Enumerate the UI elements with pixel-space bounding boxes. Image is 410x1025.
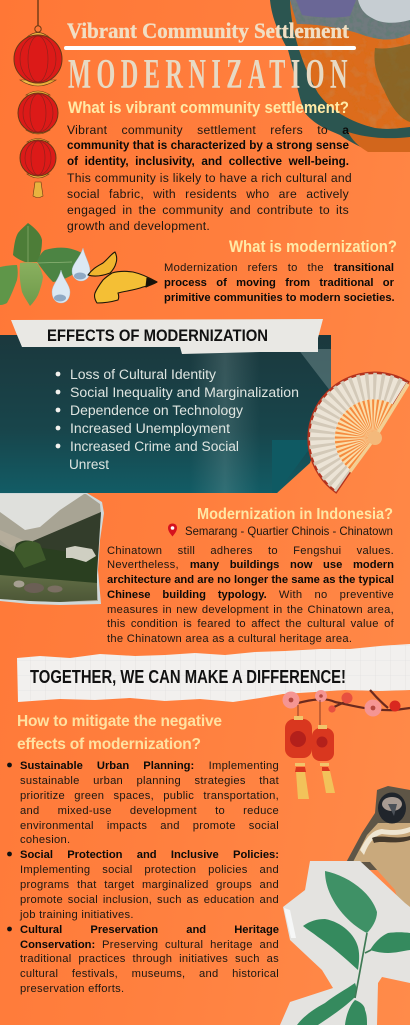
title: MODERNIZATION: MODERNIZATION bbox=[68, 51, 348, 98]
text block: mitigation strategies: preservation efforts. bbox=[20, 983, 124, 995]
text block: chinatown: Nevertheless, many buildings now use modern bbox=[107, 559, 394, 571]
fan bbox=[309, 373, 410, 492]
text block: vibrant community definition: of identity, inclusivity, and collective well-being. bbox=[67, 155, 349, 168]
text block: modernization definition: primitive communities to modern societies. bbox=[164, 292, 395, 304]
text block: vibrant community definition: community that is characterized by a strong sense bbox=[67, 139, 349, 152]
icon: water drops bbox=[52, 248, 90, 303]
text block: chinatown: measures in new development in the Chinatown area, bbox=[107, 604, 394, 616]
list: effects bbox=[56, 367, 299, 472]
text block: chinatown: the Chinatown area as a cultural heritage area. bbox=[107, 633, 352, 645]
text block: chinatown: Chinese building typology. With no preventive bbox=[107, 589, 394, 601]
text block: mitigation strategies: Sustainable Urban Planning: Implementing bbox=[20, 760, 279, 772]
list: effects: Unrest bbox=[69, 457, 109, 472]
list: effects: Social Inequality and Marginalization bbox=[70, 385, 299, 400]
heading: what is vibrant community settlement: What is vibrant community settlement? bbox=[68, 98, 349, 117]
penguin collage bbox=[342, 786, 410, 922]
text block: mitigation strategies: environmental impacts and promote social bbox=[20, 820, 279, 832]
heading: effects of modernization: EFFECTS OF MODERNIZATION bbox=[47, 326, 268, 345]
list: effects: Increased Unemployment bbox=[70, 421, 230, 436]
text block: modernization definition: Modernization refers to the transitional bbox=[164, 262, 394, 274]
text block: mitigation strategies bbox=[20, 760, 279, 995]
text block: mitigation strategies: prioritize green spaces, public transportation, bbox=[20, 790, 279, 802]
bullet markers bbox=[7, 763, 12, 931]
text block: chinatown bbox=[107, 544, 394, 645]
text block: modernization definition: process of moving from traditional or bbox=[164, 277, 394, 289]
icon: yellow butterfly bbox=[88, 252, 157, 303]
text block: mitigation strategies: cultural festivals, museums, and historical bbox=[20, 968, 279, 980]
text block: vibrant community definition: This community is likely to have a rich cultural and bbox=[67, 171, 352, 185]
icon: small hanging lanterns bbox=[285, 700, 335, 799]
text block: mitigation strategies: Cultural Preservation and Heritage bbox=[20, 924, 279, 936]
text block: mitigation strategies: job training initiatives. bbox=[20, 909, 134, 921]
crumpled paper with green plant bbox=[280, 861, 410, 1025]
list: effects: Loss of Cultural Identity bbox=[70, 367, 216, 382]
text block: mitigation strategies: sustainable urban planning strategies that bbox=[20, 775, 279, 787]
heading: how to mitigate: How to mitigate the negative bbox=[17, 713, 222, 730]
text block: chinatown: architecture and are no longer the same as the typical bbox=[107, 574, 394, 586]
text block: mitigation strategies: Social Protection and Inclusive Policies: bbox=[20, 849, 279, 861]
icon: location pin bbox=[168, 524, 177, 536]
list: effects: Increased Crime and Social bbox=[70, 439, 239, 454]
text block: mitigation strategies: and mixed-use development to reduce bbox=[20, 805, 279, 817]
text block: mitigation strategies: promote social inclusion, such as education and bbox=[20, 894, 279, 906]
icon: hanging red lanterns bbox=[14, 0, 62, 198]
text block: chinatown: this condition is feared to affect the cultural value of bbox=[107, 618, 394, 630]
planet collage top right bbox=[270, 0, 410, 152]
branch with blossoms bbox=[282, 690, 410, 716]
text block: vibrant community definition bbox=[67, 123, 352, 233]
icon: green leaves bbox=[0, 223, 82, 306]
text block: chinatown: Chinatown still adheres to Fengshui values. bbox=[107, 544, 394, 556]
text block: mitigation strategies: Conservation: Preserving cultural heritage and bbox=[20, 938, 279, 950]
list: effects: Dependence on Technology bbox=[70, 403, 243, 418]
heading: modernization in indonesia: Modernization in Indonesia? bbox=[197, 506, 393, 523]
heading: effects of modernization line two: effects of modernization? bbox=[17, 736, 201, 753]
title underline bbox=[64, 46, 356, 50]
tape behind heading bbox=[11, 319, 323, 354]
text block: mitigation strategies: cohesion. bbox=[20, 834, 70, 846]
text block: vibrant community definition: engaged in the community and contribute to its bbox=[67, 203, 349, 217]
photo: mountain meadow bbox=[0, 493, 104, 605]
text block: vibrant community definition: social fabric, with residents who are actively bbox=[67, 187, 349, 201]
banner text: TOGETHER, WE CAN MAKE A DIFFERENCE! bbox=[30, 667, 346, 687]
title: Vibrant Community Settlement: Vibrant Community Settlement bbox=[67, 18, 350, 43]
text block: modernization definition bbox=[164, 262, 395, 304]
text block: mitigation strategies: programs that target marginalized groups and bbox=[20, 879, 279, 891]
panel: effects background bbox=[0, 335, 331, 493]
text block: mitigation strategies: Implementing social protection policies and bbox=[20, 864, 279, 876]
text block: vibrant community definition: Vibrant community settlement refers to a bbox=[67, 123, 349, 137]
location label: Semarang - Quartier Chinois - Chinatown bbox=[185, 524, 393, 538]
text block: vibrant community definition: growth and development. bbox=[67, 219, 210, 233]
text block: mitigation strategies: traditional practices through initiatives such as bbox=[20, 953, 279, 965]
torn paper banner bbox=[17, 644, 410, 702]
